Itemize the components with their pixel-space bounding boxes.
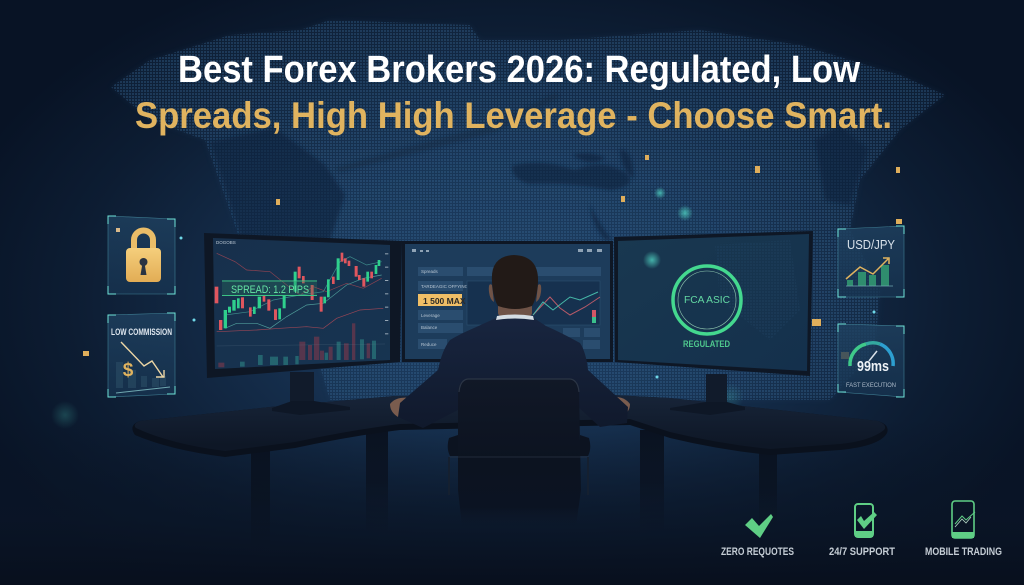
label: fast execution: FAST EXECUTION xyxy=(846,382,896,389)
icon: check xyxy=(745,514,773,538)
monitor: trading platform xyxy=(402,241,613,362)
title xyxy=(135,49,892,136)
badge: FCA ASIC ring xyxy=(673,266,741,334)
neck xyxy=(498,296,532,316)
sidebar: account controls: Reduce xyxy=(421,342,437,347)
person: trader from behind xyxy=(390,255,630,428)
label: regulated: REGULATED xyxy=(683,339,730,349)
icon: padlock xyxy=(126,231,161,282)
monitor: regulated xyxy=(614,231,813,376)
monitor: spread chart xyxy=(204,233,402,378)
callout: spread: SPREAD: 1.2 PIPS xyxy=(231,284,309,296)
title line 1: Best Forex Brokers 2026: Regulated, Low xyxy=(178,49,860,91)
feature: 24/7 support xyxy=(829,504,895,558)
desk xyxy=(132,395,888,457)
label: ZERO REQUOTES xyxy=(721,546,794,558)
arrow: rising price xyxy=(846,258,889,279)
panel: lock xyxy=(108,216,175,294)
hands xyxy=(390,398,414,417)
label: USD/JPY: USD/JPY xyxy=(847,237,895,252)
chart: falling bars xyxy=(116,362,166,388)
left monitor stand xyxy=(272,372,350,415)
chair xyxy=(448,379,590,526)
action buttons xyxy=(563,328,600,349)
header icons xyxy=(412,249,602,252)
shirt collar xyxy=(496,314,534,320)
callout: spread xyxy=(222,281,317,296)
panel: low commission xyxy=(108,313,175,397)
suit xyxy=(398,318,628,428)
ears xyxy=(489,284,541,302)
badge: FCA ASIC ring: FCA ASIC xyxy=(684,295,730,306)
map dots on screen xyxy=(715,240,800,340)
glowing network points xyxy=(51,187,876,429)
right monitor stand xyxy=(670,374,745,415)
title line 2: Spreads, High High Leverage - Choose Smart. xyxy=(135,95,892,136)
value: 99ms: 99ms xyxy=(857,358,889,375)
dark seas cut out of the map xyxy=(210,93,868,320)
floor shadow xyxy=(0,420,1024,585)
world map dotted background xyxy=(111,20,945,400)
icon: phone check xyxy=(855,504,877,537)
icon: dollar sign: $ xyxy=(123,360,134,381)
mini chart xyxy=(467,281,600,325)
sidebar: account controls: Spreads xyxy=(421,269,439,274)
gold data points xyxy=(83,155,902,359)
highlighted leverage value: 1 500 MAX xyxy=(423,296,466,306)
feature: mobile trading xyxy=(925,501,1002,558)
icon: phone chart xyxy=(952,501,975,538)
label: 24/7 SUPPORT xyxy=(829,546,895,558)
header label: DOGOBS xyxy=(216,240,236,245)
sidebar: account controls: TARDEAGIC OFFYING xyxy=(421,284,469,289)
label: low commission: LOW COMMISSION xyxy=(111,327,172,338)
hair xyxy=(492,255,538,309)
feature: zero requotes xyxy=(721,514,794,558)
chart: rising bars xyxy=(847,265,889,286)
toolbar xyxy=(467,267,601,276)
desk legs xyxy=(251,430,777,555)
label: MOBILE TRADING xyxy=(925,546,1002,558)
icon: speed gauge xyxy=(850,343,893,366)
sidebar: account controls: Balance xyxy=(421,325,438,330)
chart: candles and lines xyxy=(215,253,388,367)
arrow: falling commission xyxy=(121,342,164,377)
panel: USD/JPY xyxy=(838,226,904,297)
sidebar: account controls xyxy=(418,267,469,349)
sidebar: account controls: Leverage xyxy=(421,313,440,318)
panel: fast execution speedometer xyxy=(838,324,904,397)
